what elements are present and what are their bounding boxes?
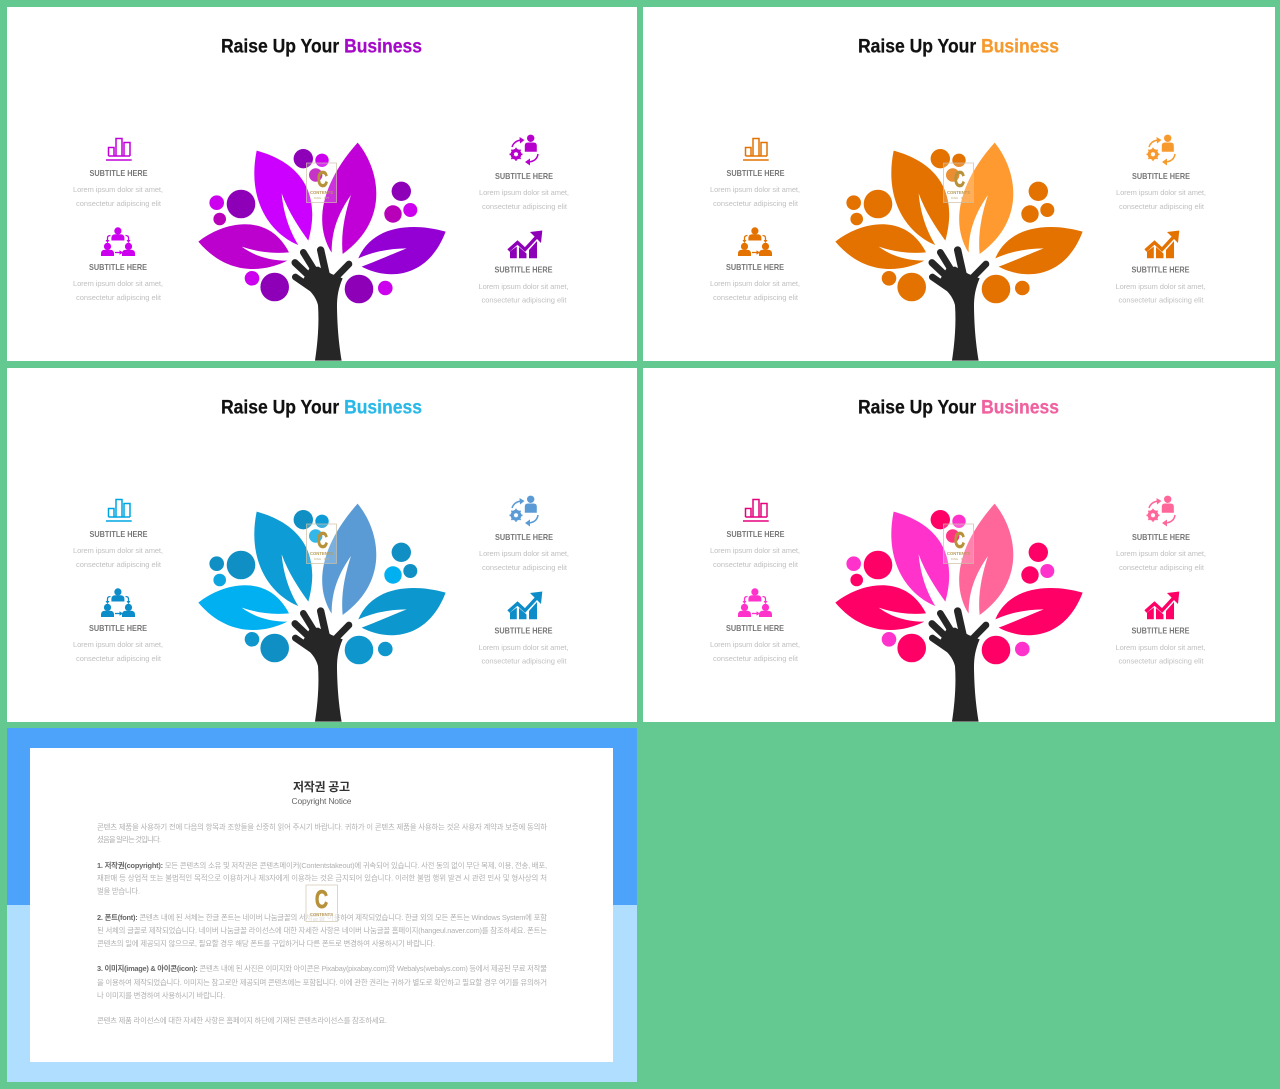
watermark: C [315,886,328,914]
text block: right bottom [478,626,568,666]
text block: left bottom: Lorem ipsum dolor sit amet, [710,640,800,649]
text block: right top: Lorem ipsum dolor sit amet, [479,188,569,197]
text block: left top: consectetur adipiscing elit [713,199,799,208]
text block: left bottom: consectetur adipiscing elit [713,654,799,663]
text block: right bottom: SUBTITLE HERE [1132,264,1190,274]
text block: left top: Lorem ipsum dolor sit amet, [73,546,163,555]
text block: left bottom: Lorem ipsum dolor sit amet, [710,279,800,288]
paragraph: copyright: 1. 저작권(copyright): 모든 콘텐츠의 소유 및 저작권은 콘텐츠메이커(Contentstakeout)에 귀속되어 있습니다. 사전 동의 없이 무단 복제, 이용, 전송, 배포, [97,861,547,870]
icon: growth chart [508,592,542,619]
paragraph: image and icon [97,964,547,1000]
text block: left bottom [710,262,800,302]
heading: copyright notice: 저작권 공고 [293,779,350,794]
hand trunk [295,611,349,722]
text block: right bottom: consectetur adipiscing elit [482,656,567,666]
text block: right top: SUBTITLE HERE [1132,532,1190,542]
intro paragraph: 셨음을 알리는 것입니다. [97,835,161,844]
watermark [944,524,974,564]
text block: left bottom: consectetur adipiscing elit [76,654,162,663]
paragraph: license: 콘텐츠 제품 라이선스에 대한 자세한 사항은 홈페이지 하단에 기재된 콘텐츠라이선스를 참조하세요. [97,1016,387,1025]
text block: right top [1116,532,1206,572]
text block: right bottom: consectetur adipiscing elit [1118,296,1204,304]
text block: left top [710,529,800,569]
text block: right bottom: SUBTITLE HERE [494,264,553,274]
watermark [306,885,338,922]
text block: right bottom: Lorem ipsum dolor sit amet, [1116,282,1206,291]
text block: left top: SUBTITLE HERE [726,529,785,539]
slide 1: purple tree [7,7,637,361]
intro paragraph: 콘텐츠 제품을 사용하기 전에 다음의 항목과 조항들을 신중히 읽어 주시기 바랍니다. 귀하가 이 콘텐츠 제품을 사용하는 것은 사용자 계약과 보증에 동의하 [97,822,547,832]
paragraph: font: 2. 폰트(font): 콘텐츠 내에 된 서체는 한글 폰트는 네이버 나눔글꼴의 서체들을 이용하여 제작되었습니다. 한글 외의 모든 폰트는 Windows System에 포함 [97,913,547,922]
text block: right top: SUBTITLE HERE [495,532,553,542]
paragraph: font: 된 서체의 글꼴로 제작되었습니다. 네이버 나눔글꼴 라이선스에 대한 자세한 사항은 네이버 나눔글꼴 홈페이지(hangeul.naver.com)를 참조하세요. 폰트는 [97,926,547,935]
text block: right bottom: Lorem ipsum dolor sit amet, [1116,643,1206,652]
text block: left bottom: SUBTITLE HERE [89,262,147,272]
text block: left top [710,168,800,208]
watermark: CONTENTS [310,912,333,917]
text block: left bottom [73,623,163,663]
icon: gear and person [1146,496,1175,526]
text block: right top [1116,171,1206,211]
text block: right top: SUBTITLE HERE [1132,171,1190,181]
watermark [944,163,974,202]
text block: left bottom: consectetur adipiscing elit [76,293,162,302]
icon: bar chart [106,138,132,160]
icon: people cycle [101,588,135,617]
icon: growth chart [1146,592,1179,619]
text block: left bottom: Lorem ipsum dolor sit amet, [73,279,163,288]
slide 4: pink tree [643,368,1275,722]
text block: left bottom: SUBTITLE HERE [89,623,147,633]
icon: bar chart [106,500,132,521]
text block: left bottom: SUBTITLE HERE [726,262,784,272]
text block: left top: Lorem ipsum dolor sit amet, [710,185,800,194]
text block: right bottom: consectetur adipiscing elit [482,296,567,304]
text block: left bottom [73,262,163,302]
text block: right top: consectetur adipiscing elit [482,202,568,211]
hand trunk [295,250,349,361]
paragraph: copyright: 벌을 받습니다. [97,886,140,896]
icon: bar chart [743,500,769,521]
paragraph: copyright: 재판매 등 상업적 또는 불법적인 목적으로 이용하거나 제3자에게 이용하는 것은 금지되어 있습니다. 이러한 불법 행위 발견 시 관련 민사 및 형사상의 처 [97,874,547,882]
slide 5: copyright notice [7,728,637,1082]
text block: right top: consectetur adipiscing elit [1119,563,1205,572]
text block: right bottom: Lorem ipsum dolor sit amet, [478,643,568,652]
paragraph: image and icon: 3. 이미지(image) & 아이콘(icon): 콘텐츠 내에 된 사진은 이미지와 아이콘은 Pixabay(pixabay.com)와 Webalys(webalys.com) 등에서 제공된 무료 저작물 [97,964,547,973]
text block: right bottom [1116,264,1206,304]
tree leaves and circles [835,143,1083,303]
text block: left top: consectetur adipiscing elit [76,560,162,569]
text block: right top: consectetur adipiscing elit [1119,202,1205,211]
title: Raise Up Your Business [221,36,422,58]
text block: left bottom: Lorem ipsum dolor sit amet, [73,640,163,649]
text block: right bottom: consectetur adipiscing elit [1118,656,1204,666]
text block: right top [479,171,569,211]
icon: bar chart [743,138,769,160]
title: Raise Up Your Business [858,36,1059,58]
paragraph: font [97,913,547,948]
text block: right bottom: SUBTITLE HERE [494,626,553,636]
text block: left top: Lorem ipsum dolor sit amet, [73,185,163,194]
text block: left top: consectetur adipiscing elit [76,199,162,208]
text block: right bottom [1116,626,1206,666]
text block: right top [479,532,569,572]
icon: people cycle [738,227,772,256]
watermark [306,524,336,564]
text block: left bottom: consectetur adipiscing elit [713,293,799,302]
title: Raise Up Your Business [221,396,422,418]
text block: left top: Lorem ipsum dolor sit amet, [710,546,800,555]
icon: gear and person [510,496,538,526]
slide 2: orange tree [643,7,1275,361]
tree leaves and circles [835,504,1083,664]
icon: growth chart [508,230,542,258]
text block: left top [73,529,163,569]
text block: left top [73,168,163,208]
icon: gear and person [510,135,538,166]
icon: growth chart [1146,230,1179,258]
paragraph: copyright [97,861,547,896]
text block: right top: Lorem ipsum dolor sit amet, [479,549,569,558]
text block: right top: SUBTITLE HERE [495,171,553,181]
icon: people cycle [101,227,135,256]
tree leaves and circles [198,504,446,664]
hand trunk [932,250,986,361]
text block: right bottom: SUBTITLE HERE [1132,626,1190,636]
paragraph: font: 콘텐츠의 일에 제공되지 않으므로, 필요할 경우 해당 폰트를 구입하거나 다른 폰트로 변경하여 사용하시기 바랍니다. [97,939,435,948]
tree leaves and circles [198,143,446,303]
text block: left top: SUBTITLE HERE [90,529,148,539]
text block: left top: consectetur adipiscing elit [713,560,799,569]
text block: right bottom [478,264,568,304]
text block: right top: Lorem ipsum dolor sit amet, [1116,188,1206,197]
title: Raise Up Your Business [858,396,1059,418]
text block: left top: SUBTITLE HERE [726,168,785,178]
paragraph: image and icon: 을 이용하여 제작되었습니다. 이미지는 참고로만 제공되며 콘텐츠에는 포함됩니다. 이에 관한 권리는 귀하가 별도로 확인하고 필요할 경우 여기를 유의하거 [97,978,547,987]
text block: left top: SUBTITLE HERE [90,168,148,178]
watermark [306,163,336,202]
intro paragraph [97,822,547,844]
slide 3: blue tree [7,368,637,722]
text block: left bottom: SUBTITLE HERE [726,623,784,633]
text block: right bottom: Lorem ipsum dolor sit amet, [478,282,568,291]
hand trunk [932,611,986,722]
subheading: Copyright Notice [292,796,352,806]
text block: left bottom [710,623,800,663]
icon: gear and person [1146,135,1175,166]
text block: right top: consectetur adipiscing elit [482,563,568,572]
paragraph: image and icon: 나 이미지를 변경하여 사용하시기 바랍니다. [97,991,225,1000]
icon: people cycle [738,588,772,617]
text block: right top: Lorem ipsum dolor sit amet, [1116,549,1206,558]
